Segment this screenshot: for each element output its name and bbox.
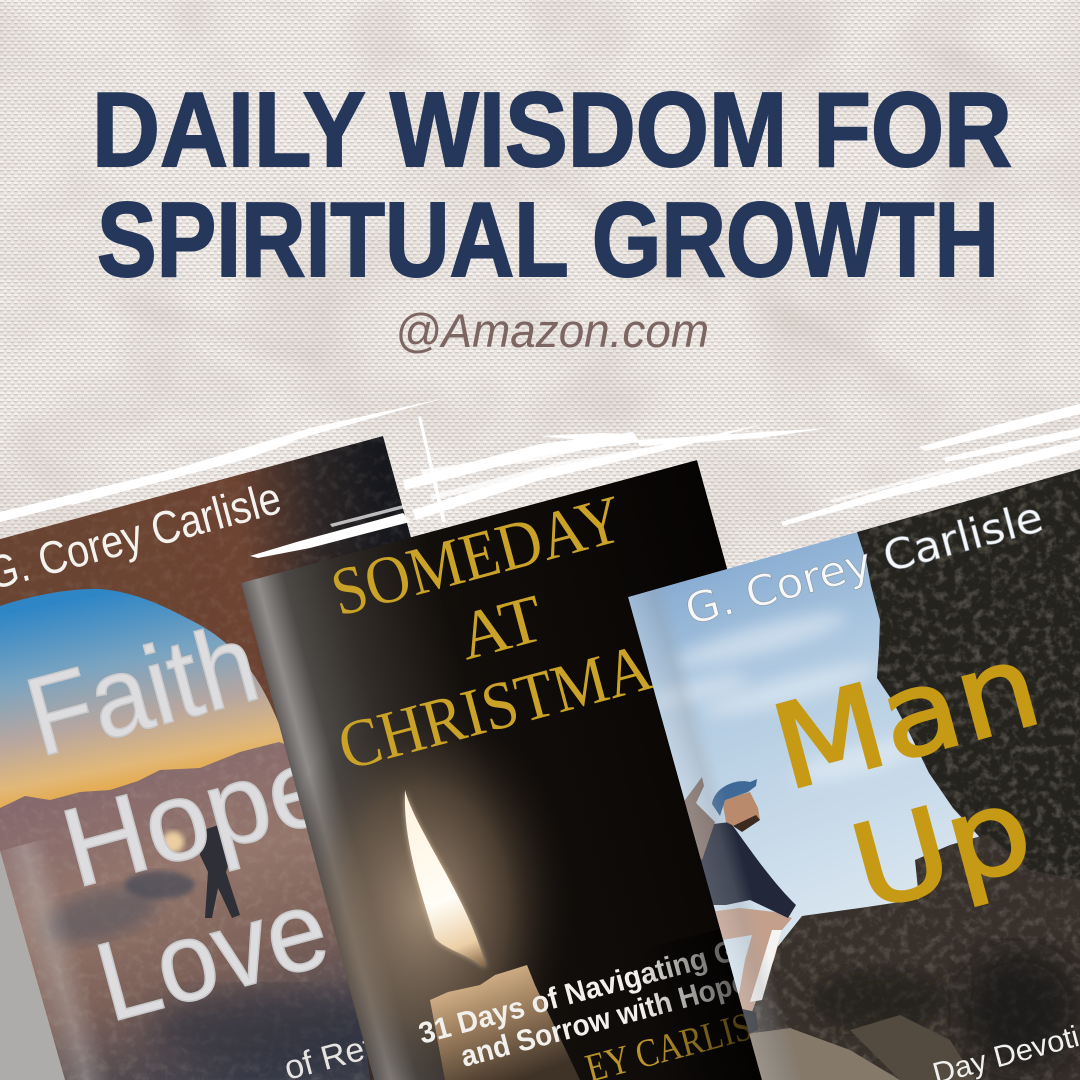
leg — [708, 908, 792, 1012]
book cover: Faith Hope Love — [0, 436, 411, 1080]
hiker — [682, 777, 796, 1036]
page block corner — [0, 851, 65, 1080]
title — [92, 71, 1012, 299]
title words: Faith — [14, 599, 270, 780]
book title: AT — [450, 579, 551, 674]
silhouette of hiker — [200, 824, 240, 918]
book subtitle: 31 Days of Navigating Grief — [415, 922, 784, 1051]
candle glow — [304, 737, 552, 1080]
book subtitle: and Sorrow with Hope — [457, 966, 751, 1074]
author name: G. Corey Carlisle — [680, 492, 1048, 635]
book cover: Someday at Christmas — [241, 460, 762, 1080]
book 1 artwork — [0, 436, 411, 1080]
candle — [430, 965, 580, 1080]
book cover: Man Up — [628, 460, 1080, 1080]
flame — [405, 790, 486, 968]
book title: SOMEDAY — [323, 480, 631, 630]
shadow toward next book — [643, 942, 750, 1062]
spine shading — [628, 586, 802, 1080]
foreground rock — [746, 1028, 900, 1080]
head — [723, 792, 760, 826]
spine shading — [0, 838, 117, 1080]
title words — [14, 599, 345, 1045]
title words: Hope — [50, 720, 345, 911]
title: Man: Man — [759, 617, 1053, 817]
book title: CHRISTMAS — [330, 619, 693, 784]
lower boulders — [738, 834, 1080, 1080]
torso and arm — [695, 822, 796, 918]
book 3 artwork — [628, 460, 1080, 1080]
rock face — [850, 460, 1080, 900]
title: Up: Up — [838, 761, 1045, 937]
cap — [712, 779, 757, 816]
book subtitle — [418, 942, 738, 1066]
backpack — [682, 777, 715, 860]
white brush strokes — [0, 398, 1080, 558]
title words: Love — [84, 864, 340, 1045]
subtitle: @Amazon.com — [395, 304, 709, 357]
clouds — [654, 608, 915, 785]
book title — [334, 496, 654, 766]
